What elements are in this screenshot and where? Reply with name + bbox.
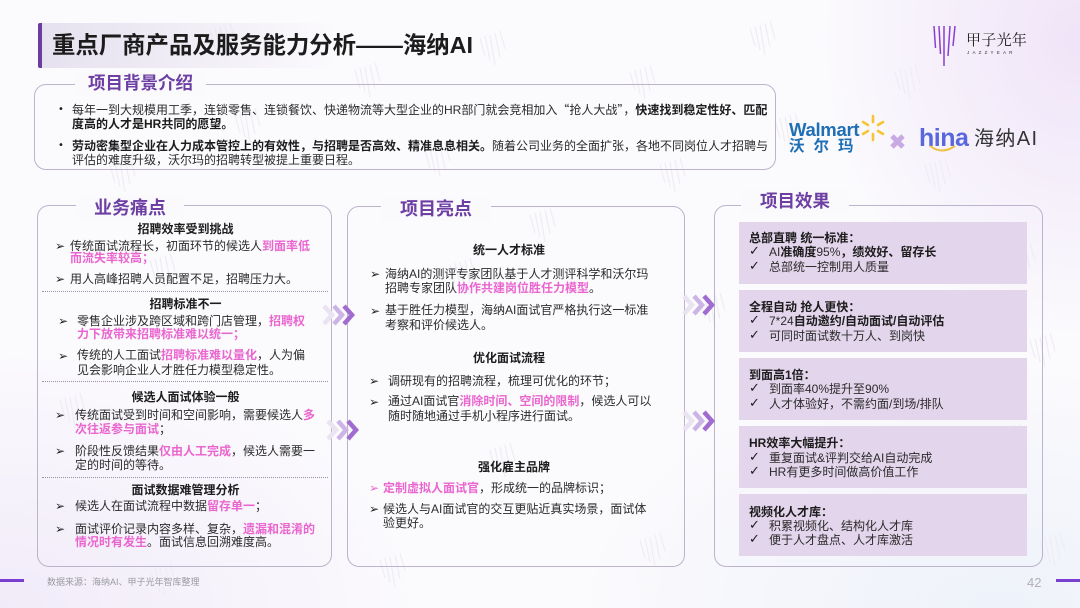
text: strict execution: 考察和评价候选人。 bbox=[385, 318, 493, 332]
card item: 总部统一控制用人质量 bbox=[769, 260, 889, 274]
card item: 积累视频化、结构化人才库 bbox=[769, 519, 913, 533]
heading: results bbox=[741, 189, 849, 213]
text: evaluation records bbox=[75, 522, 315, 549]
footer source: 数据来源：海纳AI、甲子光年智库整理 bbox=[47, 577, 200, 587]
bullet: • bbox=[58, 104, 64, 115]
logo: JazzYear bbox=[933, 26, 1027, 66]
result card: HR efficiency bbox=[739, 426, 1027, 488]
card title: 视频化人才库： bbox=[749, 505, 833, 519]
heading: pain points bbox=[76, 196, 184, 220]
check mark: ✓ bbox=[749, 532, 760, 547]
text: joint model bbox=[385, 267, 648, 295]
text: process review: 调研现有的招聘流程，梳理可优化的环节； bbox=[388, 374, 616, 388]
card item: HR有更多时间做高价值工作 bbox=[769, 465, 918, 479]
text: evaluation records: 情况时有发生。面试信息回溯难度高。 bbox=[75, 535, 279, 549]
arrow bullet: ➢ bbox=[55, 239, 65, 253]
text: staged feedback: 定的时间的等待。 bbox=[75, 458, 171, 472]
card item: 到面率40%提升至90% bbox=[769, 382, 889, 396]
hina smile bbox=[930, 145, 956, 152]
arrow bullet: ➢ bbox=[55, 499, 65, 513]
text: long process: 而流失率较高； bbox=[70, 251, 154, 265]
icon: logo bars bbox=[933, 26, 956, 66]
logo latin wordmark: JAZZYEAR bbox=[967, 50, 1016, 55]
panel: project results bbox=[714, 205, 1043, 567]
card item: 重复面试&评判交给AI自动完成 bbox=[769, 451, 932, 465]
icon: cross bbox=[890, 134, 905, 149]
subheading: recruiting efficiency: 招聘效率受到挑战 bbox=[137, 222, 234, 236]
arrow bullet: ➢ bbox=[58, 349, 68, 363]
card item: 人才体验好，不需约面/到场/排队 bbox=[769, 397, 944, 411]
heading: pain points: 业务痛点 bbox=[94, 198, 166, 218]
card title: 总部直聘 统一标准： bbox=[749, 231, 860, 245]
arrow bullet: ➢ bbox=[55, 522, 65, 536]
panel: project background bbox=[34, 84, 776, 170]
heading: highlights: 项目亮点 bbox=[400, 199, 472, 219]
check mark: ✓ bbox=[749, 396, 760, 411]
arrow bullet: ➢ bbox=[55, 408, 65, 422]
check mark: ✓ bbox=[749, 464, 760, 479]
heading: project background bbox=[75, 71, 206, 95]
check mark: ✓ bbox=[749, 259, 760, 274]
result card: show-up rate bbox=[739, 358, 1027, 420]
subheading: data management: 面试数据难管理分析 bbox=[131, 483, 240, 497]
Walmart Chinese wordmark: 沃尔玛 bbox=[789, 138, 863, 155]
page number: 42 bbox=[1027, 575, 1041, 590]
text block: paragraph two bbox=[72, 139, 768, 167]
subheading: candidate experience: 候选人面试体验一般 bbox=[131, 390, 240, 404]
text: remove limits bbox=[388, 394, 651, 423]
arrow bullet: ➢ bbox=[370, 267, 380, 281]
text: manual interview bbox=[77, 348, 305, 377]
text: strict execution bbox=[385, 303, 648, 332]
panel: business pain points bbox=[37, 205, 332, 567]
arrow: pain points to highlights upper bbox=[322, 304, 355, 326]
text: staged feedback: 阶段性反馈结果仅由人工完成，候选人需要一 bbox=[75, 444, 315, 458]
text: interaction: 候选人与AI面试官的交互更贴近真实场景，面试体 bbox=[383, 502, 646, 516]
footer accent left bbox=[0, 579, 24, 582]
logo: hina bbox=[919, 124, 1038, 152]
text: remove limits: 随时随地通过手机小程序进行面试。 bbox=[388, 409, 580, 423]
Walmart wordmark: Walmart bbox=[789, 119, 859, 140]
text: strict execution: 基于胜任力模型，海纳AI面试官严格执行这一标准 bbox=[385, 303, 648, 317]
logo: Walmart bbox=[789, 114, 884, 155]
hina Chinese wordmark: 海纳AI bbox=[974, 128, 1038, 150]
hina wordmark: hina bbox=[919, 124, 968, 152]
text block: paragraph two: 劳动密集型企业在人力成本管控上的有效性，与招聘是否高效、精准息息相关。随着公司业务的全面扩张，各地不同岗位人才招聘与 bbox=[72, 139, 768, 153]
text block: paragraph one: 度高的人才是HR共同的愿望。 bbox=[72, 117, 233, 131]
arrow bullet: ➢ bbox=[369, 374, 379, 388]
text: virtual interviewer: 定制虚拟人面试官，形成统一的品牌标识； bbox=[383, 481, 611, 495]
result card: HQ hiring bbox=[739, 222, 1027, 284]
arrow: highlights to results lower bbox=[682, 410, 715, 432]
card title: 全程自动 抢人更快： bbox=[749, 300, 860, 314]
check mark: ✓ bbox=[749, 313, 760, 328]
bullet: • bbox=[58, 140, 64, 151]
arrow: highlights to results upper bbox=[682, 294, 715, 316]
check mark: ✓ bbox=[749, 328, 760, 343]
text: peak staffing: 用人高峰招聘人员配置不足，招聘压力大。 bbox=[70, 272, 298, 286]
text: long process: 传统面试流程长，初面环节的候选人到面率低 bbox=[70, 239, 310, 253]
logo wordmark: 甲子光年 bbox=[966, 29, 1027, 50]
text: evaluation records: 面试评价记录内容多样、复杂，遗漏和混淆的 bbox=[75, 522, 315, 536]
text block: paragraph one: 每年一到大规模用工季，连锁零售、连锁餐饮、快递物流等大型企业的HR部门就会竞相加入“抢人大战”，快速找到稳定性好、匹配 bbox=[72, 101, 767, 118]
arrow bullet: ➢ bbox=[369, 481, 379, 495]
check mark: ✓ bbox=[749, 450, 760, 465]
text: staged feedback bbox=[75, 444, 315, 472]
text: joint model: 招聘专家团队协作共建岗位胜任力模型。 bbox=[385, 281, 601, 295]
text block: paragraph two: 评估的难度升级，沃尔玛的招聘转型被提上重要日程。 bbox=[72, 153, 360, 167]
text: data retention: 候选人在面试流程中数据留存单一； bbox=[75, 499, 267, 513]
text: time and space: 传统面试受到时间和空间影响，需要候选人多 bbox=[75, 408, 315, 422]
text: time and space: 次往返参与面试； bbox=[75, 422, 171, 436]
check mark: ✓ bbox=[749, 381, 760, 396]
card item: 可同时面试数十万人、到岗快 bbox=[769, 329, 925, 343]
arrow: pain points to highlights lower bbox=[326, 420, 359, 440]
heading: highlights bbox=[381, 197, 491, 221]
text: manual interview: 传统的人工面试招聘标准难以量化，人为偏 bbox=[77, 348, 305, 362]
subheading: inconsistent standards: 招聘标准不一 bbox=[149, 297, 222, 311]
text: remove limits: 通过AI面试官消除时间、空间的限制，候选人可以 bbox=[388, 394, 651, 408]
text: retail cross region: 零售企业涉及跨区域和跨门店管理，招聘权 bbox=[77, 314, 305, 328]
arrow bullet: ➢ bbox=[369, 502, 379, 516]
text: joint model: 海纳AI的测评专家团队基于人才测评科学和沃尔玛 bbox=[385, 267, 648, 281]
check mark: ✓ bbox=[749, 518, 760, 533]
card item: 便于人才盘点、人才库激活 bbox=[769, 533, 913, 547]
check mark: ✓ bbox=[749, 244, 760, 259]
text: manual interview: 见会影响企业人才胜任力模型稳定性。 bbox=[77, 363, 281, 377]
card item: 7*24自动邀约/自动面试/自动评估 bbox=[769, 314, 944, 328]
heading: project background: 项目背景介绍 bbox=[88, 73, 193, 93]
heading: results: 项目效果 bbox=[760, 191, 830, 211]
subheading: optimize process: 优化面试流程 bbox=[473, 351, 545, 365]
footer accent right bbox=[1056, 579, 1080, 582]
title bar bbox=[38, 23, 338, 68]
arrow bullet: ➢ bbox=[369, 395, 379, 409]
text: time and space bbox=[75, 408, 315, 436]
text: long process bbox=[70, 239, 310, 265]
text: interaction: 验更好。 bbox=[383, 516, 431, 530]
subheading: employer brand: 强化雇主品牌 bbox=[478, 460, 550, 474]
card title: HR效率大幅提升： bbox=[749, 436, 850, 450]
subheading: unified standards: 统一人才标准 bbox=[473, 243, 545, 257]
text: retail cross region bbox=[77, 314, 305, 341]
arrow bullet: ➢ bbox=[55, 444, 65, 458]
result card: talent pool bbox=[739, 494, 1027, 556]
panel: project highlights bbox=[347, 206, 685, 567]
arrow bullet: ➢ bbox=[58, 314, 68, 328]
card item: AI准确度95%，绩效好、留存长 bbox=[769, 245, 936, 259]
title: 重点厂商产品及服务能力分析——海纳AI bbox=[52, 32, 473, 58]
text: interaction bbox=[383, 502, 646, 530]
arrow bullet: ➢ bbox=[55, 272, 65, 286]
text block: paragraph one bbox=[72, 101, 768, 131]
text: retail cross region: 力下放带来招聘标准难以统一； bbox=[77, 327, 245, 341]
result card: automation bbox=[739, 290, 1027, 352]
card title: 到面高1倍： bbox=[749, 368, 816, 382]
arrow bullet: ➢ bbox=[370, 304, 380, 318]
icon: Walmart spark bbox=[862, 114, 884, 142]
